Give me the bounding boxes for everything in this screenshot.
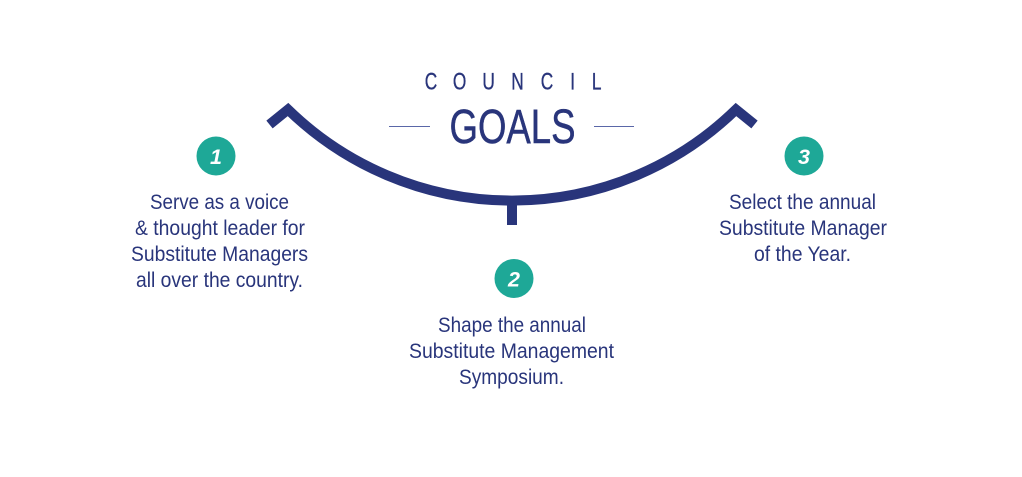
text: goal 1 description: all over the country.	[136, 269, 303, 292]
goal 2	[409, 259, 614, 389]
text: goal 3 description	[719, 191, 887, 266]
text: goal 1 description: Serve as a voice	[150, 191, 289, 214]
title	[425, 69, 601, 154]
heading: council: COUNCIL	[425, 69, 601, 95]
text: goal 3 description: Select the annual	[729, 191, 876, 214]
icon: number badge 1: 1	[210, 145, 222, 169]
icon: number badge 3	[784, 136, 824, 176]
text: goal 1 description: Substitute Managers	[131, 243, 308, 266]
heading: goals: GOALS	[450, 101, 576, 154]
smile-shaped arc with chevron ends and stem	[270, 110, 754, 225]
icon: number badge 2	[494, 259, 534, 298]
icon: number badge 1	[196, 136, 236, 176]
goal 1	[131, 136, 308, 292]
goal 3	[719, 136, 887, 266]
text: goal 3 description: of the Year.	[754, 243, 851, 266]
text: goal 2 description: Shape the annual	[438, 314, 586, 337]
text: goal 2 description: Symposium.	[459, 366, 564, 389]
text: goal 2 description: Substitute Management	[409, 340, 614, 363]
text: goal 2 description	[409, 314, 614, 389]
text: goal 1 description	[131, 191, 308, 292]
icon: number badge 3: 3	[798, 145, 810, 169]
icon: number badge 2: 2	[507, 267, 520, 291]
text: goal 3 description: Substitute Manager	[719, 217, 887, 240]
text: goal 1 description: & thought leader for	[135, 217, 305, 240]
